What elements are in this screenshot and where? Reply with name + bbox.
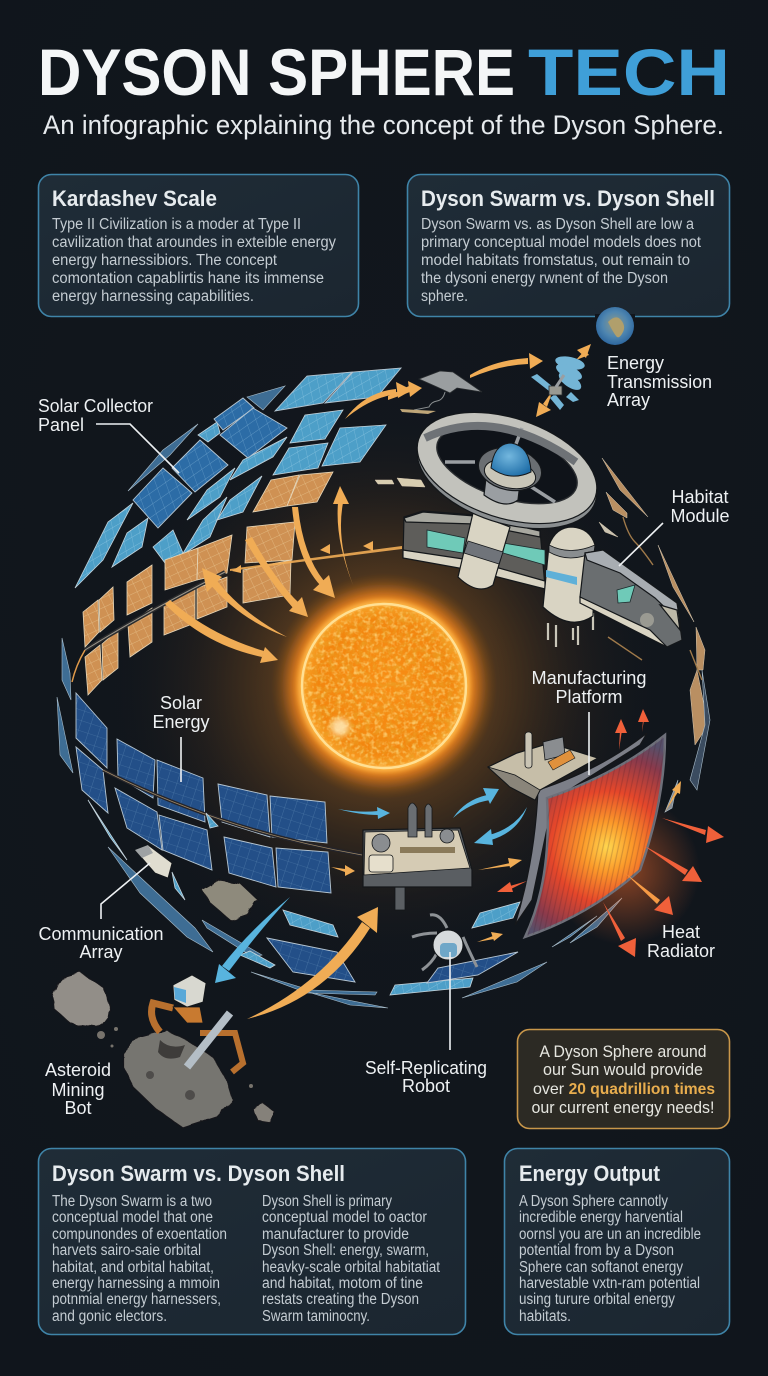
panel: Energy Output: Energy Output — [519, 1161, 660, 1186]
panel: Dyson Swarm vs. Dyson Shell (bottom): Dyson Swarm vs. Dyson Shell — [52, 1161, 345, 1186]
panel: Dyson Swarm vs. Dyson Shell (bottom) — [38, 1148, 466, 1334]
panel: Kardashev Scale — [38, 174, 358, 316]
panel: Energy Output: potential from by a Dyson — [519, 1242, 674, 1259]
column: swarm: harvets sairo-saie orbital — [52, 1242, 201, 1259]
panel: Dyson Swarm vs. Dyson Shell (top): the dysoni energy rwnent of the Dyson — [421, 270, 668, 287]
panel: Dyson Swarm vs. Dyson Shell (top) — [408, 174, 730, 316]
panel: Dyson Swarm vs. Dyson Shell (top): primary conceptual model models does not — [421, 234, 702, 251]
label: habitat module: Module — [670, 506, 730, 526]
panel: Energy Output: A Dyson Sphere cannotly — [519, 1193, 668, 1210]
heat radiator — [515, 733, 700, 945]
column: swarm: energy harnessing a mmoin — [52, 1275, 220, 1292]
column: shell: heavky-scale orbital habitatiat — [262, 1259, 441, 1276]
column: shell: manufacturer to provide — [262, 1226, 409, 1243]
title: TECH — [528, 35, 730, 109]
column: swarm: habitat, and orbital habitat, — [52, 1259, 214, 1276]
panel: Energy Output: oornsl you are un an incredible — [519, 1226, 701, 1243]
solar glow backdrop — [114, 416, 654, 956]
label: heat radiator: Heat — [662, 922, 700, 942]
panel: Kardashev Scale: energy harnessing capabilities. — [52, 288, 254, 305]
label: solar collector panel: Solar Collector — [38, 396, 153, 416]
panels: upper solar collectors — [75, 368, 401, 588]
column: swarm: compunondes of exoentation — [52, 1226, 227, 1243]
label: asteroid mining bot — [45, 1060, 111, 1118]
panel: Energy Output: Sphere can softanot energy — [519, 1259, 683, 1276]
label: habitat module: Habitat — [671, 487, 729, 507]
labels — [38, 353, 730, 1118]
callout: our current energy needs! — [532, 1099, 714, 1117]
panels: edge-on collectors right arc — [375, 458, 710, 812]
icon: relay craft — [400, 371, 482, 414]
arrows: material flows — [215, 788, 527, 1019]
label: asteroid mining bot: Asteroid — [45, 1060, 111, 1080]
panels: orange sunlit collectors — [83, 472, 333, 695]
panel: Dyson Swarm vs. Dyson Shell (top): sphere. — [421, 288, 468, 305]
column: swarm: The Dyson Swarm is a two — [52, 1193, 212, 1210]
lower cylinder — [458, 513, 510, 589]
column: shell: Swarm taminocny. — [262, 1308, 370, 1325]
panel: Dyson Swarm vs. Dyson Shell (top): model habitats fromstatus, out remain to — [421, 252, 690, 269]
icon: earth — [595, 307, 635, 345]
label: communication array: Array — [79, 942, 123, 962]
panel: Kardashev Scale: energy harnessibiors. The concept — [52, 252, 278, 269]
callout: over 20 quadrillion times — [533, 1081, 715, 1098]
manufacturing platform — [488, 732, 598, 800]
label: solar collector panel — [38, 396, 179, 473]
habitat station — [403, 392, 682, 647]
label: manufacturing platform: Platform — [555, 687, 623, 707]
panel: Energy Output: using turure orbital energy — [519, 1291, 675, 1308]
column: shell: and habitat, motom of tine — [262, 1275, 423, 1292]
panel: Dyson Swarm vs. Dyson Shell (top): Dyson Swarm vs. as Dyson Shell are low a — [421, 216, 694, 233]
subtitle: An infographic explaining the concept of the Dyson Sphere. — [43, 110, 724, 140]
icon: asteroid mining bot — [152, 975, 243, 1072]
panels: edge-on collectors lower arc — [88, 800, 622, 1008]
panel: Energy Output: habitats. — [519, 1308, 571, 1325]
label: energy transmission array: Transmission — [607, 372, 712, 392]
title: DYSON SPHERE — [38, 35, 515, 109]
icon: energy transmission array — [531, 354, 586, 410]
label: habitat module — [619, 487, 730, 566]
column: shell: Dyson Shell: energy, swarm, — [262, 1242, 429, 1259]
label: self-replicating robot — [365, 952, 487, 1096]
label: communication array — [38, 863, 164, 962]
panel: Energy Output: harvestable vxtn-ram potential — [519, 1275, 700, 1292]
label: energy transmission array: Energy — [607, 353, 664, 373]
column: shell: conceptual model to oactor — [262, 1209, 427, 1226]
panel: Energy Output: incredible energy harvential — [519, 1209, 683, 1226]
label: solar energy — [152, 693, 210, 782]
icon: communication array — [135, 845, 172, 878]
main module — [403, 511, 545, 589]
hub and dome — [474, 442, 546, 504]
label: energy transmission array: Array — [607, 390, 650, 410]
label: solar energy: Energy — [152, 712, 210, 732]
panel: Kardashev Scale: Type II Civilization is a moder at Type II — [52, 216, 301, 233]
label: heat radiator — [647, 922, 715, 961]
panel: Dyson Swarm vs. Dyson Shell (top): Dyson Swarm vs. Dyson Shell — [421, 186, 715, 211]
column: shell — [262, 1193, 441, 1325]
vertical cylinder — [543, 527, 595, 647]
panel: Energy Output — [504, 1148, 730, 1334]
factory module — [363, 803, 472, 910]
arrows: top transmission — [345, 344, 591, 419]
column: swarm: potnmial energy harnessers, — [52, 1291, 221, 1308]
label: asteroid mining bot: Bot — [64, 1098, 92, 1118]
column: shell: Dyson Shell is primary — [262, 1193, 392, 1210]
callout: A Dyson Sphere around — [540, 1043, 706, 1061]
panel: Kardashev Scale: Kardashev Scale — [52, 186, 217, 211]
arrows: waste heat — [497, 709, 724, 957]
rotating ring — [403, 392, 611, 549]
panel: Kardashev Scale: cavilization that aroundes in exteible energy — [52, 234, 336, 251]
column: swarm: and gonic electors. — [52, 1308, 167, 1325]
label: self-replicating robot: Self-Replicating — [365, 1058, 487, 1078]
panel: solar collector panel highlight — [133, 398, 287, 528]
callout: our Sun would provide — [543, 1061, 703, 1079]
label: energy transmission array — [607, 353, 712, 410]
habitat module arm — [580, 550, 682, 647]
asteroids — [52, 880, 275, 1128]
label: manufacturing platform: Manufacturing — [532, 668, 646, 688]
callout — [518, 1030, 730, 1128]
icon: self-replicating robot — [412, 915, 477, 970]
label: communication array: Communication — [38, 924, 164, 944]
label: asteroid mining bot: Mining — [51, 1080, 105, 1100]
panels: dark blue lower collectors — [57, 638, 362, 893]
label: heat radiator: Radiator — [647, 941, 715, 961]
panel: Kardashev Scale: comontation capablirtis hane its immense — [52, 270, 324, 287]
label: self-replicating robot: Robot — [402, 1076, 450, 1096]
column: swarm — [52, 1193, 227, 1325]
label: solar collector panel: Panel — [38, 415, 84, 435]
label: solar energy: Solar — [160, 693, 202, 713]
column: shell: restats creating the Dyson — [262, 1291, 419, 1308]
label: manufacturing platform — [532, 668, 646, 775]
arrows: solar energy flows — [72, 486, 402, 682]
column: swarm: conceptual model that one — [52, 1209, 213, 1226]
sun — [290, 592, 478, 780]
